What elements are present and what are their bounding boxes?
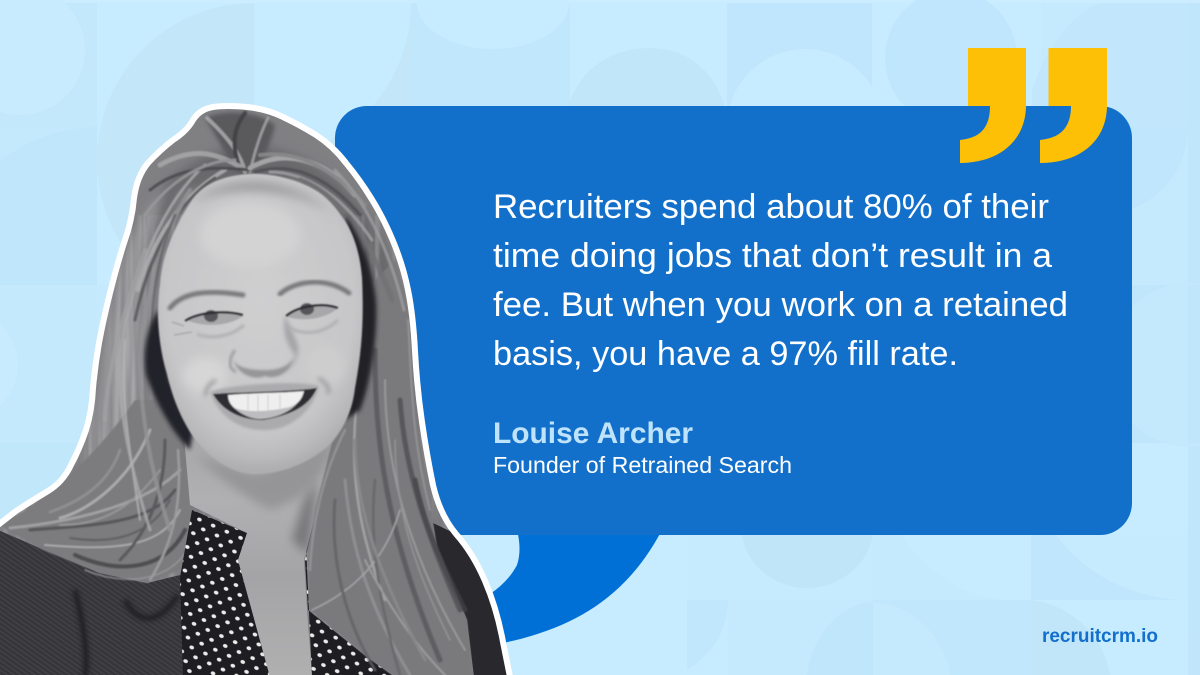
portrait of Louise Archer bbox=[0, 100, 520, 675]
hair dark texture bbox=[1, 221, 402, 532]
quote text: basis, you have a 97% fill rate. bbox=[493, 335, 958, 373]
attribution role: Founder of Retrained Search bbox=[493, 452, 792, 478]
jacket fold shadow bbox=[75, 590, 178, 675]
lips bbox=[210, 383, 319, 430]
under chin shadow bbox=[204, 445, 330, 511]
brand logo text: recruitcrm.io bbox=[1042, 626, 1158, 647]
right hair curtain bbox=[308, 260, 473, 675]
left hair sweep bbox=[0, 400, 195, 583]
dark hair shadow left of face bbox=[145, 310, 195, 450]
right eyebrow bbox=[280, 282, 349, 294]
lower teeth bbox=[232, 402, 298, 419]
hair strands top and left bbox=[105, 113, 404, 530]
chin shadow bbox=[170, 425, 345, 485]
neck and chest bbox=[183, 425, 335, 675]
quote text: time doing jobs that don’t result in a bbox=[493, 237, 1052, 275]
speech bubble panel bbox=[335, 106, 1132, 535]
polka dot shirt right bbox=[305, 517, 395, 675]
face bbox=[150, 170, 370, 485]
left eyebrow bbox=[170, 292, 243, 308]
nose bridge shadow bbox=[282, 317, 300, 369]
dark hair shadow right of face bbox=[345, 215, 376, 420]
hairline shading bbox=[198, 178, 324, 208]
quote text bbox=[493, 188, 1068, 373]
hair tone shading bbox=[90, 112, 470, 670]
quote text: Recruiters spend about 80% of their bbox=[493, 188, 1049, 226]
hair texture bbox=[1, 215, 448, 658]
nose bbox=[233, 358, 293, 378]
mouth opening bbox=[213, 388, 317, 420]
speech bubble tail bbox=[490, 530, 662, 644]
smile lines bbox=[206, 378, 329, 396]
polka dot shirt left bbox=[180, 510, 270, 675]
right eye bbox=[285, 303, 338, 333]
icon: yellow closing quotation marks bbox=[960, 48, 1107, 163]
white cut-out outline bbox=[0, 106, 510, 675]
hair base bbox=[0, 100, 518, 675]
quote text: fee. But when you work on a retained bbox=[493, 286, 1068, 324]
right hair strands bbox=[310, 320, 465, 675]
upper teeth bbox=[228, 391, 304, 411]
jacket right bbox=[433, 523, 510, 675]
attribution name: Louise Archer bbox=[493, 417, 693, 450]
crow's feet bbox=[172, 322, 192, 335]
left hair sweep strands bbox=[10, 430, 190, 580]
cheek highlights bbox=[184, 358, 224, 392]
jacket left bbox=[0, 530, 190, 675]
left eye bbox=[185, 310, 244, 337]
